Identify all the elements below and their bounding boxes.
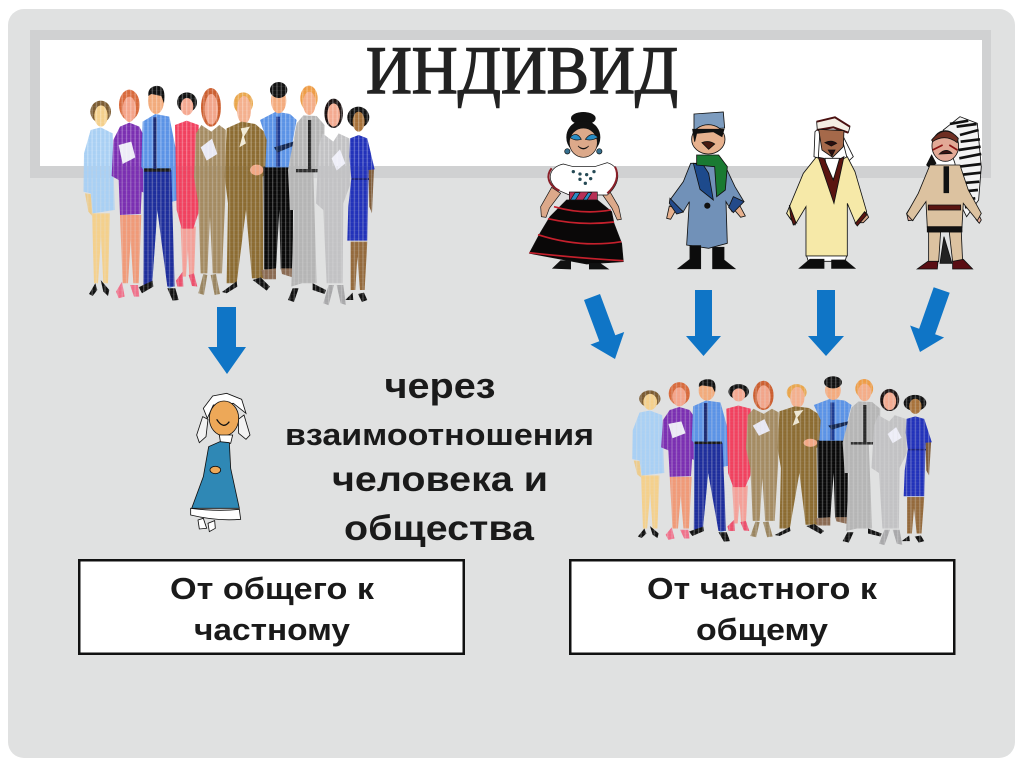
figure: man in feather headdress — [907, 117, 981, 269]
title: ИНДИВИД — [366, 32, 678, 108]
group of people: left — [83, 82, 375, 305]
figure: man in coat and scarf — [667, 112, 745, 269]
arrow: to crowd 3 — [808, 290, 844, 356]
arrow: left down — [208, 307, 246, 374]
arrow: to crowd 4 — [910, 287, 950, 352]
figure: small woman in bonnet — [191, 393, 250, 532]
figure: woman in flamenco dress — [529, 112, 623, 269]
figure: man in Arab robe — [787, 117, 869, 268]
box: от общего к частному: частному — [194, 612, 351, 647]
arrow: to crowd 1 — [584, 294, 624, 359]
box: от частного к общему — [570, 560, 954, 654]
text: общества: общества — [344, 509, 535, 548]
box: от общего к частному: От общего к — [170, 571, 375, 606]
title panel — [30, 30, 991, 178]
box: от частного к общему: общему — [696, 612, 829, 647]
box: от общего к частному — [79, 560, 464, 654]
text: человека и: человека и — [332, 460, 548, 499]
arrow: to crowd 2 — [686, 290, 721, 356]
box: от частного к общему: От частного к — [647, 571, 878, 606]
text: через: через — [384, 365, 496, 406]
group of people: right — [632, 376, 932, 545]
text: взаимоотношения: взаимоотношения — [285, 417, 594, 452]
